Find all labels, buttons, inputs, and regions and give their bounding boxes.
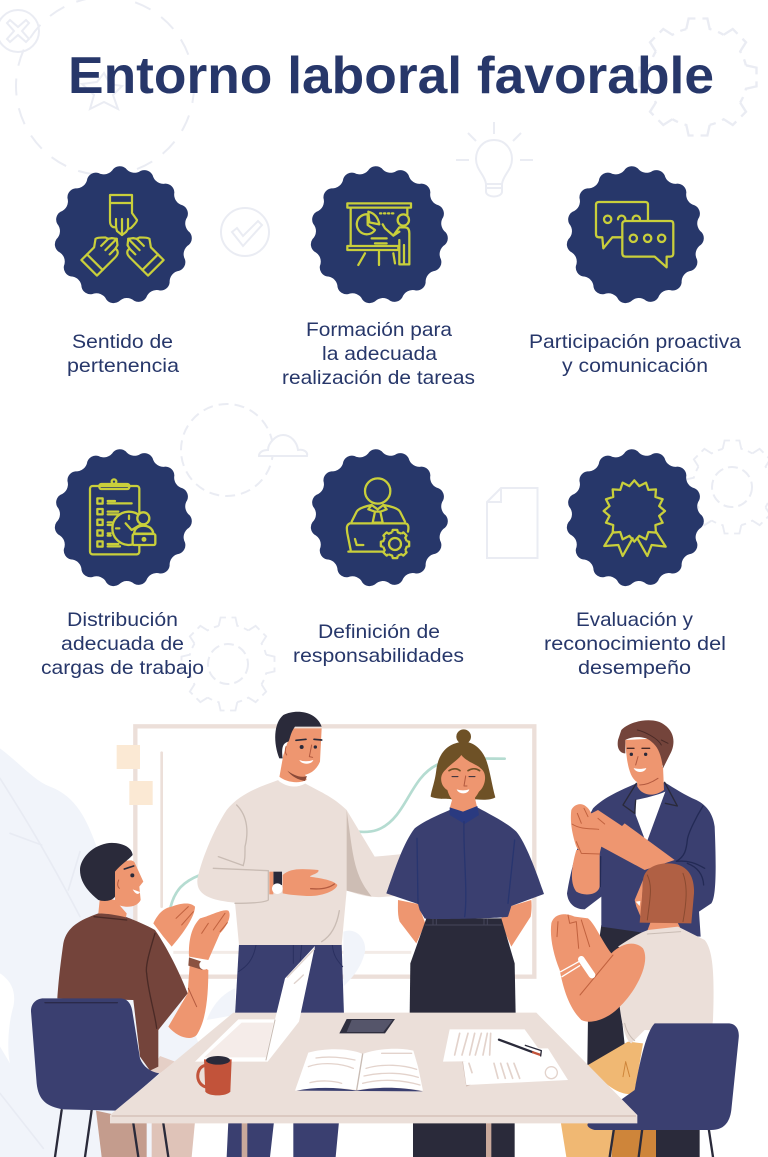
icon: three hands xyxy=(78,195,167,276)
background foliage blob xyxy=(0,748,200,1157)
person: seated man xyxy=(57,843,230,1157)
label: la adecuada xyxy=(322,343,437,365)
label xyxy=(529,331,741,377)
background icon: dashed gear top right xyxy=(639,18,757,136)
panel: evaluación xyxy=(544,446,726,679)
sticky notes xyxy=(117,745,153,805)
label: y comunicación xyxy=(562,355,708,377)
person: seated woman xyxy=(551,863,714,1157)
label: cargas de trabajo xyxy=(41,657,204,679)
label: Distribución xyxy=(67,609,178,631)
papers and pen xyxy=(443,1029,568,1087)
panel: participación xyxy=(529,163,741,377)
icon: person with laptop and gear xyxy=(347,478,409,558)
background icon: crossed circle xyxy=(0,10,39,52)
background icon: dashed circle with star xyxy=(16,0,194,175)
chair: seated woman xyxy=(587,1023,739,1157)
label xyxy=(282,319,475,389)
label: Evaluación y xyxy=(576,609,693,631)
badge xyxy=(51,446,195,589)
label: Formación para xyxy=(306,319,452,341)
label: realización de tareas xyxy=(282,367,475,389)
coffee mug xyxy=(198,1056,232,1095)
panel: definición xyxy=(293,446,464,667)
panel: distribución xyxy=(41,446,204,679)
chart line xyxy=(171,759,505,907)
person: standing man xyxy=(197,712,410,1157)
whiteboard xyxy=(135,726,534,977)
label: reconocimiento del xyxy=(544,633,726,655)
badge xyxy=(307,163,451,306)
meeting table xyxy=(110,1013,637,1123)
badge xyxy=(563,446,707,589)
background icon: gear right xyxy=(685,440,768,534)
label xyxy=(41,609,204,679)
background icon: check mark circle xyxy=(221,208,269,256)
background icon: document xyxy=(487,488,538,558)
panel: formación xyxy=(282,163,475,389)
panel: sentido de pertenencia xyxy=(51,163,195,377)
background icon: dashed circle with cloud xyxy=(181,404,307,496)
label xyxy=(293,621,464,667)
icon: speech bubbles xyxy=(596,202,673,267)
open book xyxy=(295,1049,423,1091)
pale blobs behind the table xyxy=(207,931,365,1020)
label: desempeño xyxy=(578,657,691,679)
chair: seated man xyxy=(31,998,168,1157)
badge xyxy=(307,446,451,589)
label xyxy=(67,331,179,377)
person: standing man clapping xyxy=(567,720,716,1157)
icon: award rosette xyxy=(604,480,666,556)
icon: clipboard with clock xyxy=(90,479,155,554)
illustration: team meeting xyxy=(0,712,739,1157)
label: pertenencia xyxy=(67,355,179,377)
title: Entorno laboral favorable xyxy=(68,47,714,105)
badge xyxy=(563,163,707,306)
label: adecuada de xyxy=(61,633,184,655)
label: Definición de xyxy=(318,621,440,643)
tablet xyxy=(339,1019,395,1033)
badge xyxy=(51,163,195,306)
label xyxy=(544,609,726,679)
background icon: light bulb xyxy=(456,122,533,196)
background icon: gear bottom left xyxy=(181,617,275,711)
label: responsabilidades xyxy=(293,645,464,667)
icon: presenter at board xyxy=(347,203,411,265)
laptop xyxy=(195,946,315,1062)
label: Sentido de xyxy=(72,331,173,353)
label: Participación proactiva xyxy=(529,331,741,353)
person: standing woman xyxy=(386,729,544,1157)
